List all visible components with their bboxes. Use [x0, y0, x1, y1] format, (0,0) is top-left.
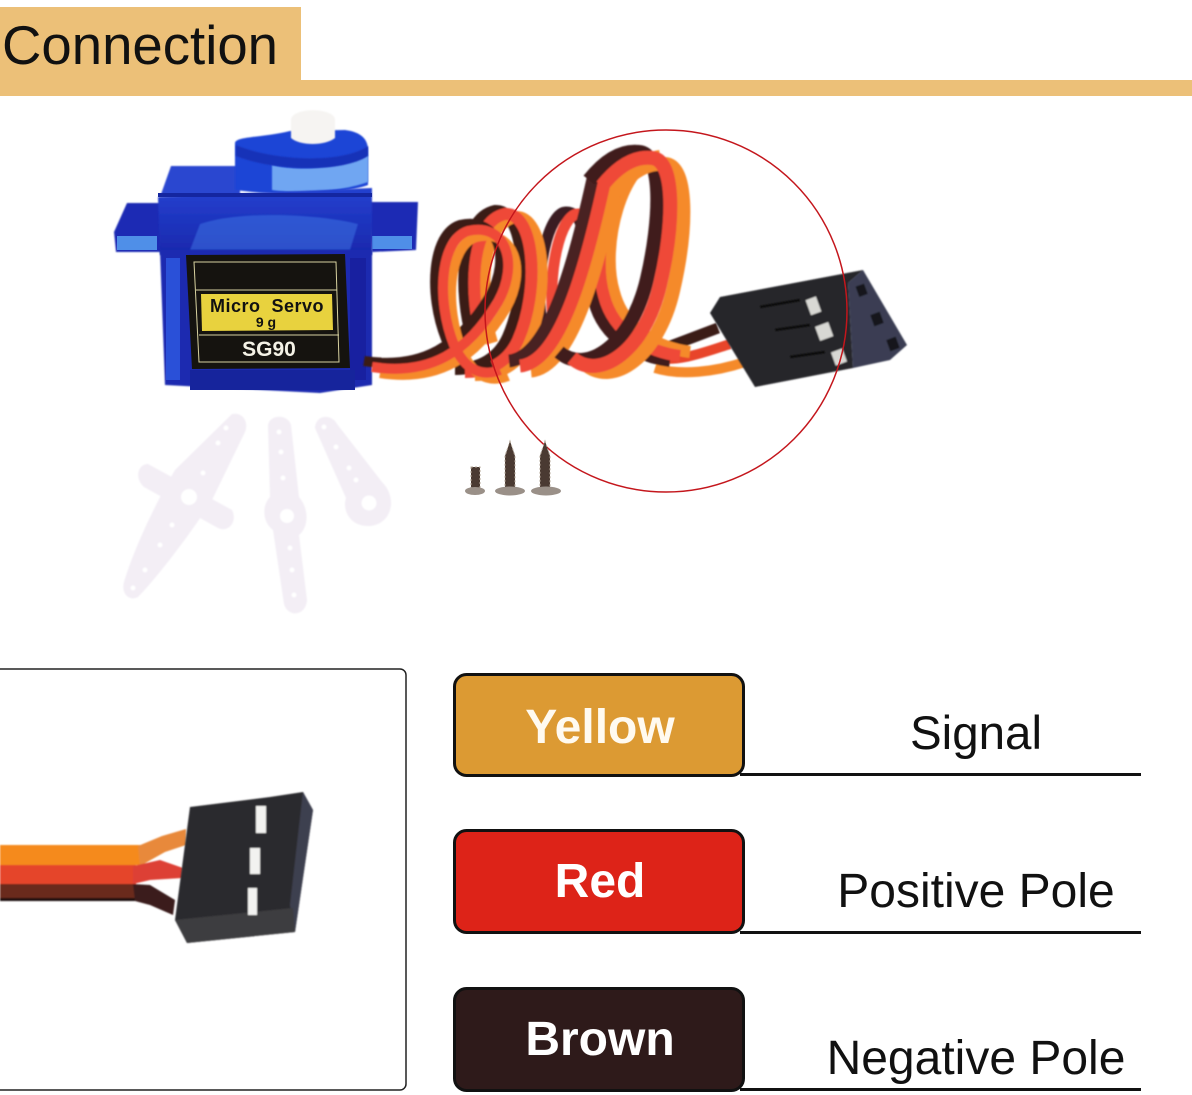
connector end face: [848, 270, 907, 368]
header: Connection: Connection: [2, 14, 278, 76]
connector body: [710, 270, 863, 387]
wire: front diagonal: [509, 179, 615, 371]
servo shaft: [291, 110, 335, 144]
product label: [186, 254, 350, 369]
servo horns: [123, 414, 391, 613]
wire bundle: [364, 152, 745, 379]
legend row: brown negative: Brown: [525, 1013, 675, 1066]
product label: 9 g: [256, 314, 276, 330]
wire: loop 1: [364, 224, 516, 379]
close-up wires: [0, 829, 186, 915]
screw: long left: [495, 441, 525, 496]
wire connector: [710, 270, 907, 387]
screw: short: [465, 467, 485, 495]
servo gear tower: [235, 130, 368, 194]
red highlight circle: [485, 130, 847, 492]
wire: back big loop strand: [590, 156, 690, 361]
servo motor: [114, 110, 418, 393]
legend row: brown negative: [454, 988, 1141, 1090]
legend row: yellow signal: [454, 674, 1141, 776]
legend row: brown negative: Negative Pole: [827, 1032, 1125, 1085]
horn: double arm cross: [123, 414, 246, 598]
header: Connection: [0, 7, 1192, 96]
wire: big front loop: [559, 152, 683, 372]
servo back top: [160, 166, 240, 197]
screw: long right: [531, 441, 561, 496]
servo upper body: [158, 188, 372, 255]
horn: straight double arm: [264, 417, 307, 613]
legend row: yellow signal: Signal: [910, 707, 1042, 760]
product label: SG90: [242, 338, 296, 361]
panel: connector close-up: [0, 669, 406, 1090]
horn: single arm: [315, 417, 391, 526]
legend row: yellow signal: Yellow: [525, 701, 675, 754]
connector pins: [806, 296, 821, 315]
wire: inner small loop: [540, 212, 595, 327]
legend row: red positive: Red: [555, 855, 645, 908]
close-up connector: [175, 792, 313, 943]
icon: left mounting ear: [114, 203, 162, 252]
icon: right mounting ear: [368, 202, 418, 252]
servo lower body: [160, 250, 372, 393]
wire: exit strands to connector: [655, 328, 745, 372]
screws: [465, 441, 561, 496]
legend row: red positive: [454, 830, 1141, 932]
wire: loop 2: [455, 211, 542, 375]
legend row: red positive: Positive Pole: [837, 865, 1115, 918]
product label: Micro Servo: [210, 296, 324, 316]
